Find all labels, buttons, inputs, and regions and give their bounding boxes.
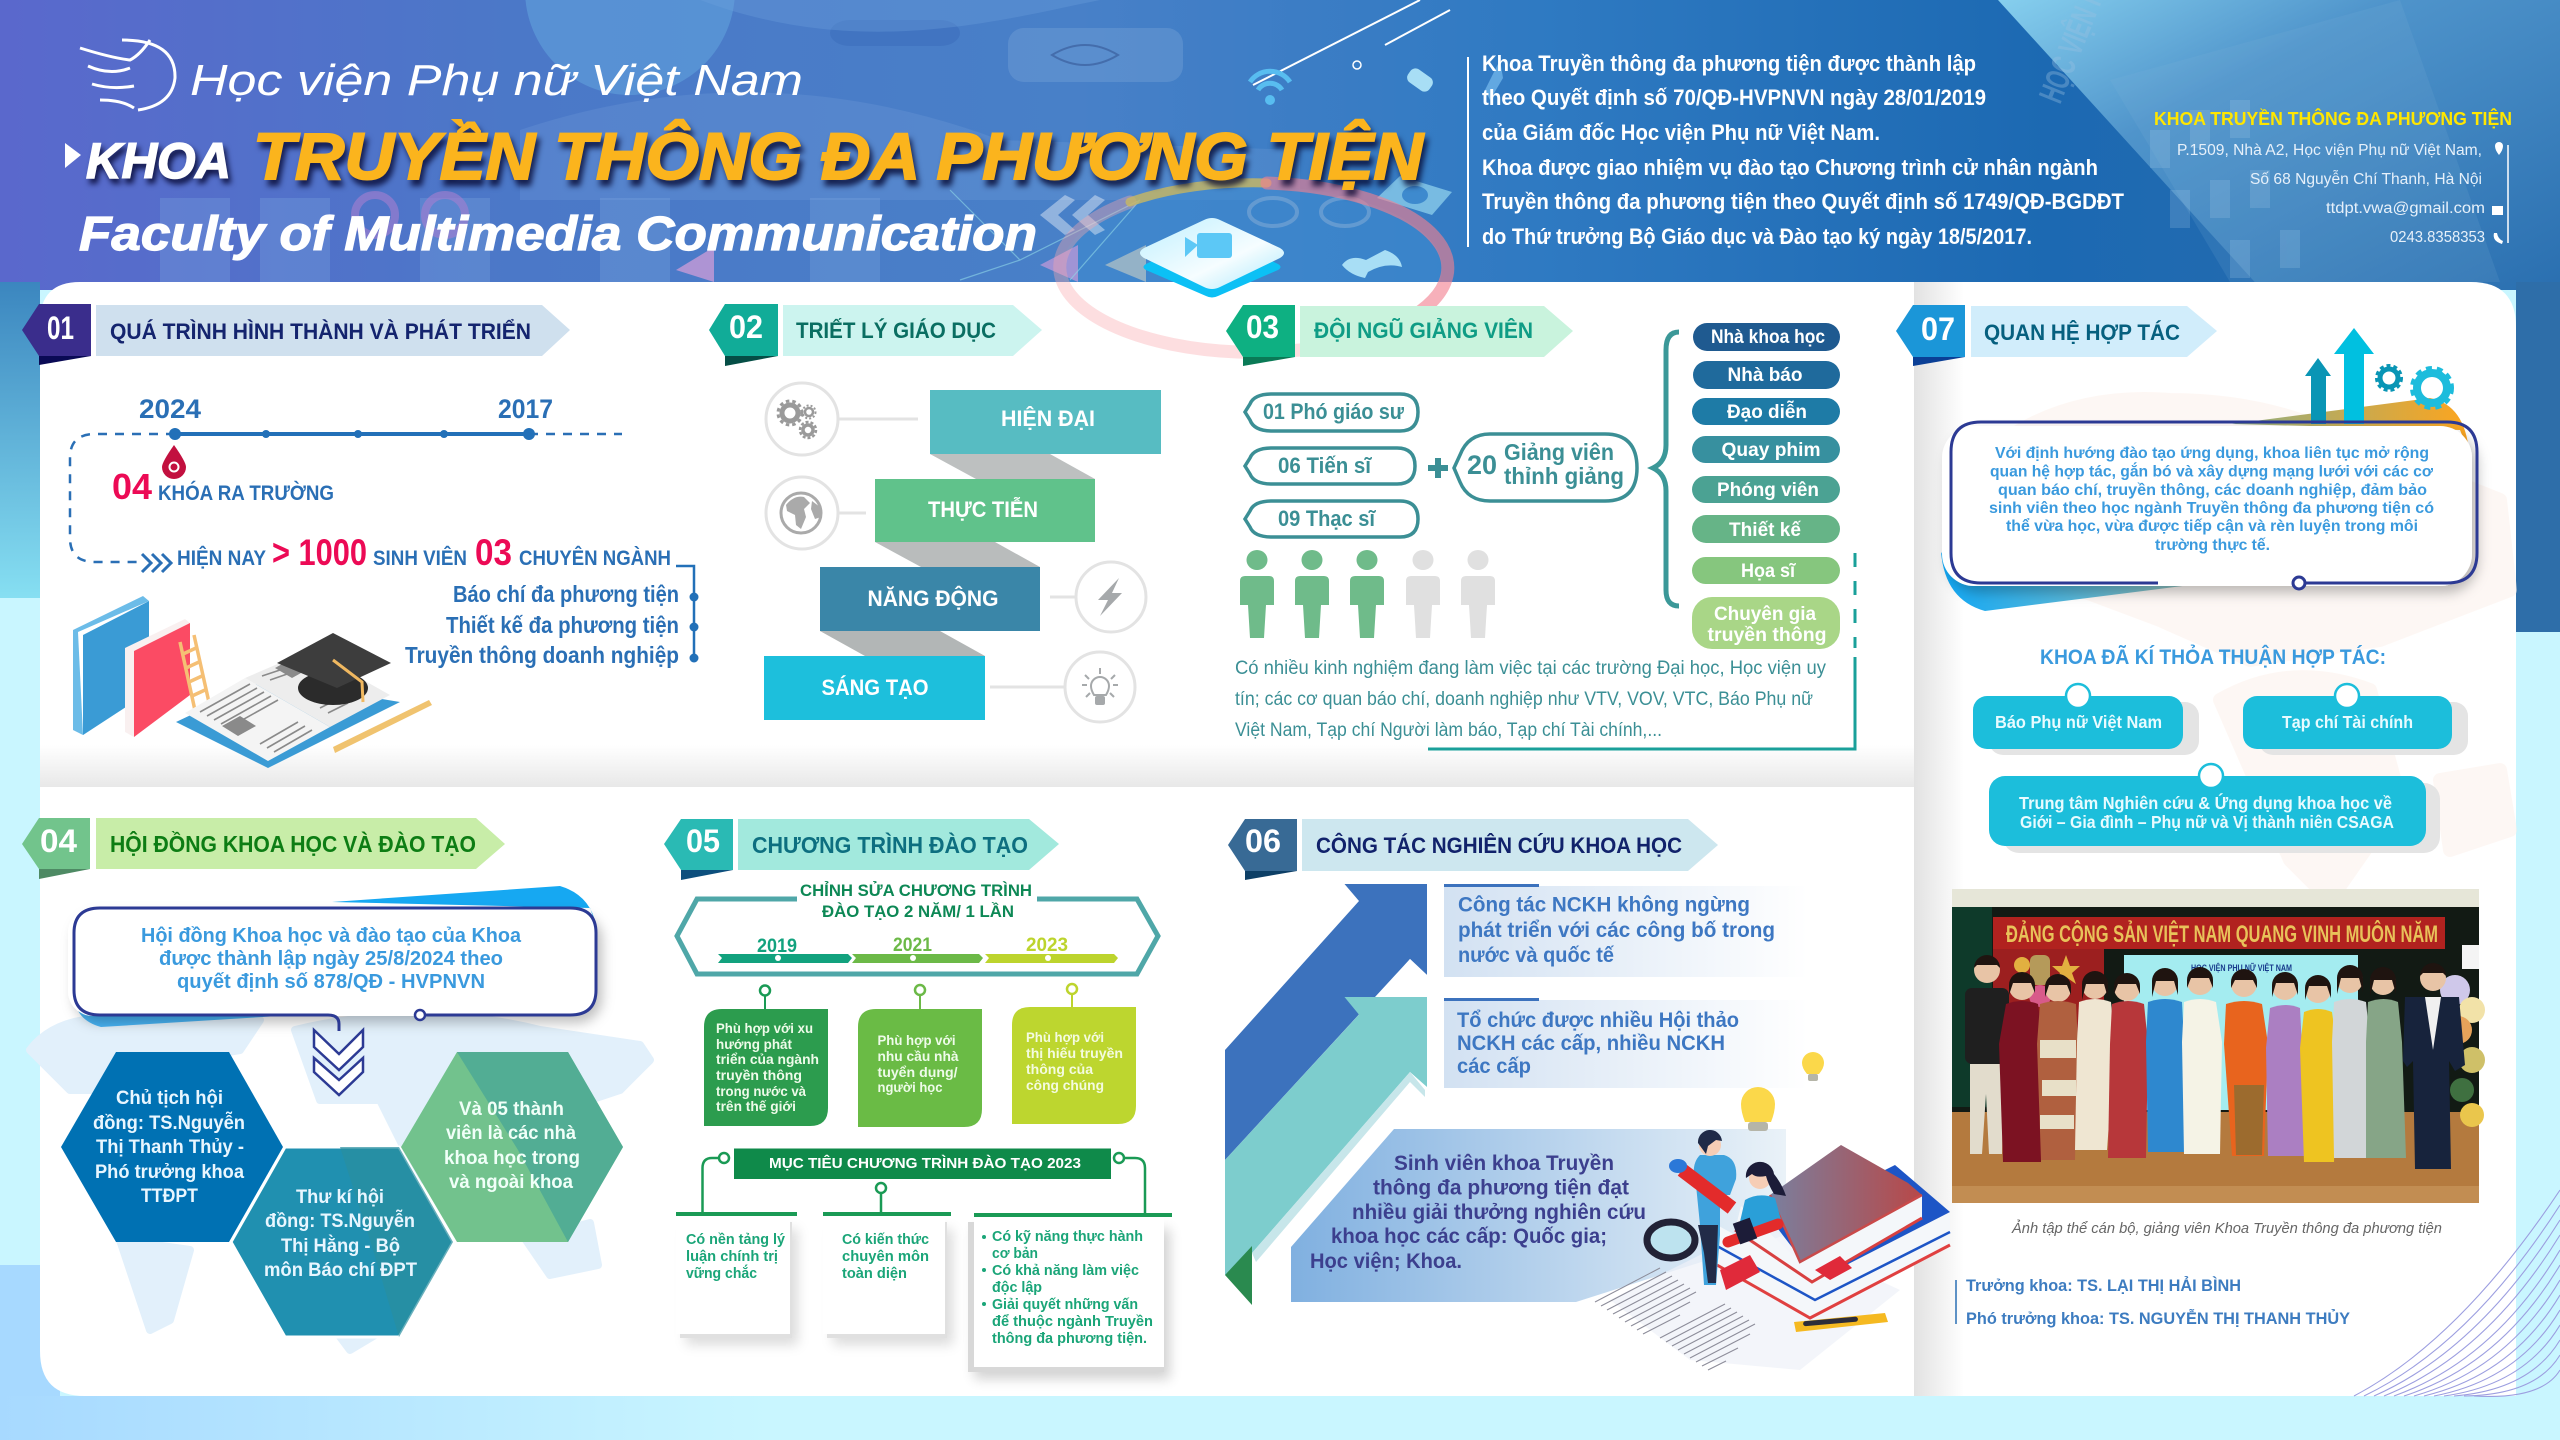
pill: visiting lecturers <box>1454 434 1637 501</box>
text panel: student awards: nhiều giải thưởng nghiên cứu <box>1352 1201 1646 1224</box>
card: 2021: tuyển dụng/ <box>878 1064 958 1080</box>
icon: globe <box>766 477 866 549</box>
list of three majors: Báo chí đa phương tiện <box>453 581 679 607</box>
objective box: practical skills: Có khả năng làm việc <box>992 1263 1139 1279</box>
callout: cooperation orientation: trường thực tế. <box>2155 537 2270 554</box>
english subtitle: Faculty of Multimedia Communication <box>79 208 1037 261</box>
pill: visiting lecturers: thỉnh giảng <box>1504 463 1624 489</box>
callout: council establishment <box>68 908 596 1031</box>
hexagon: council secretary <box>231 1147 453 1337</box>
partner: women's newspaper <box>1973 684 2199 755</box>
card: 2023: thị hiếu truyền <box>1026 1045 1123 1061</box>
header: faculty description <box>1468 51 2125 249</box>
objective box: practical skills: để thuộc ngành Truyền <box>992 1314 1153 1330</box>
arrow: double chevron down <box>314 1030 363 1095</box>
panel: 05 training programme <box>664 819 1172 1372</box>
panel: 01 formation and development <box>22 304 698 768</box>
pill: visiting lecturers: Giảng viên <box>1504 439 1614 465</box>
icon: map pin drop <box>162 445 186 479</box>
partner: CSAGA: Trung tâm Nghiên cứu & Ứng dụng khoa học về <box>2019 792 2392 813</box>
banner: 2023 objectives: MỤC TIÊU CHƯƠNG TRÌNH ĐÀO TẠO 2023 <box>769 1154 1081 1172</box>
section heading 01 <box>96 305 570 356</box>
visiting lecturer roles: Thiết kế <box>1729 520 1801 541</box>
section tab 05 <box>664 819 733 880</box>
bar: dynamic <box>820 567 1040 631</box>
arrow: blue rising <box>1225 884 1427 1160</box>
bar: modern: HIỆN ĐẠI <box>1001 406 1095 431</box>
card: 2023: thông của <box>1026 1061 1093 1077</box>
section heading 06 <box>1302 819 1718 871</box>
text panel: student awards: Học viện; Khoa. <box>1310 1250 1462 1273</box>
section tab 01 <box>22 304 91 365</box>
objective box: specialist knowledge: toàn diện <box>842 1266 907 1282</box>
background world map: peach (cooperation column) <box>1960 399 2510 900</box>
visiting lecturer roles: Phóng viên <box>1717 480 1819 501</box>
objective box: political theory: luận chính trị <box>686 1249 778 1265</box>
hexagon: council members: Và 05 thành <box>459 1099 564 1120</box>
section tab 06 <box>1228 819 1297 880</box>
objective box: political theory: vững chắc <box>686 1264 757 1282</box>
objective box: practical skills: độc lập <box>992 1280 1042 1296</box>
card: 2023 <box>1012 984 1136 1124</box>
revision timeline frame: ĐÀO TẠO 2 NĂM/ 1 LẦN <box>822 902 1014 921</box>
objective box: practical skills: thông đa phương tiện. <box>992 1331 1147 1347</box>
hexagon: council secretary: Thư kí hội <box>296 1187 384 1208</box>
text panel: student awards: khoa học các cấp: Quốc gia; <box>1331 1225 1607 1248</box>
plus sign <box>1428 458 1448 478</box>
timeline 2024 to 2017: 2024 <box>139 394 201 424</box>
faculty leaders: Phó trưởng khoa: TS. NGUYỄN THỊ THANH THỦY <box>1966 1309 2351 1328</box>
section tab 03: 03 <box>1246 309 1279 345</box>
visiting lecturer roles: Họa sĩ <box>1741 561 1797 582</box>
panel: 06 scientific research <box>1225 819 1950 1370</box>
pill: doctors <box>1245 448 1415 484</box>
panel: 04 science and training council <box>22 818 623 1337</box>
staff experience text: Có nhiều kinh nghiệm đang làm việc tại các trường Đại học, Học viện uy <box>1235 658 1826 679</box>
card: 2021: nhu cầu nhà <box>878 1048 959 1064</box>
agreements heading: KHOA ĐÃ KÍ THỎA THUẬN HỢP TÁC: <box>2040 645 2386 669</box>
curly brace <box>1653 332 1679 606</box>
callout: council establishment: được thành lập ngày 25/8/2024 theo <box>159 948 503 970</box>
card: 2019: triển của ngành <box>716 1051 819 1067</box>
hexagon: council secretary: môn Báo chí ĐPT <box>264 1260 417 1281</box>
hexagon: council secretary: Thị Hằng - Bộ <box>281 1235 400 1257</box>
bar: creative: SÁNG TẠO <box>822 675 928 700</box>
section tab 03 <box>1226 305 1295 366</box>
section tab 02 <box>709 304 778 366</box>
timeline 2024 to 2017 <box>70 394 622 572</box>
header: contact block: 0243.8358353 <box>2390 229 2485 246</box>
visiting lecturer roles: Nhà khoa học <box>1711 327 1825 348</box>
card: 2021: Phù hợp với <box>878 1032 956 1048</box>
section heading 07: QUAN HỆ HỢP TÁC <box>1984 320 2180 345</box>
section heading 02: TRIẾT LÝ GIÁO DỤC <box>796 318 996 343</box>
card: 2019: Phù hợp với xu <box>716 1020 813 1036</box>
stat: students and majors: CHUYÊN NGÀNH <box>519 546 671 570</box>
callout: council establishment: Hội đồng Khoa học và đào tạo của Khoa <box>141 925 522 947</box>
revision timeline frame: 2019 <box>757 936 797 957</box>
objective box: practical skills <box>968 1153 1172 1372</box>
text panel: workshops <box>1444 998 1808 1088</box>
objective box: political theory: Có nền tảng lý <box>686 1232 785 1248</box>
section heading 04 <box>96 818 505 869</box>
section heading 05: CHƯƠNG TRÌNH ĐÀO TẠO <box>752 831 1028 858</box>
stat: graduating cohorts <box>112 466 334 507</box>
text panel: student awards: thông đa phương tiện đạt <box>1373 1176 1629 1200</box>
stat: graduating cohorts: KHÓA RA TRƯỜNG <box>158 481 334 505</box>
hexagon: council chair: Chủ tịch hội <box>116 1088 223 1109</box>
stat: graduating cohorts: 04 <box>112 466 152 507</box>
header: title <box>65 119 1424 261</box>
partner: CSAGA: Giới – Gia đình – Phụ nữ và Vị thành niên CSAGA <box>2020 812 2394 832</box>
pill: masters <box>1245 501 1418 537</box>
decorative ring around video diamond <box>1060 183 1448 352</box>
hexagon: council members: khoa học trong <box>444 1148 580 1169</box>
hexagon: council secretary: đồng: TS.Nguyễn <box>265 1210 415 1232</box>
staff experience text: Việt Nam, Tạp chí Người làm báo, Tạp chí Tài chính,... <box>1235 720 1662 741</box>
blue swoosh <box>1941 552 2206 611</box>
header: logo and academy name <box>80 40 803 110</box>
bar: practical <box>875 479 1095 542</box>
text panel: workshops: NCKH các cấp, nhiều NCKH <box>1457 1032 1725 1055</box>
pill: masters: 09 Thạc sĩ <box>1278 506 1377 531</box>
hexagon: council members <box>401 1052 623 1242</box>
objective box: specialist knowledge <box>823 1183 951 1338</box>
stat: students and majors: 03 <box>475 532 512 573</box>
title word KHOA: KHOA <box>86 133 231 189</box>
revision timeline frame: CHỈNH SỬA CHƯƠNG TRÌNH <box>800 881 1032 900</box>
card: 2023: công chúng <box>1026 1077 1104 1093</box>
header: contact block <box>2154 108 2512 246</box>
timeline 2024 to 2017: 2017 <box>498 394 553 424</box>
pill: associate professor <box>1245 394 1418 431</box>
bar: modern <box>930 390 1161 454</box>
section tab 06: 06 <box>1245 823 1281 859</box>
header: faculty description: của Giám đốc Học viện Phụ nữ Việt Nam. <box>1482 120 1880 145</box>
arrow marker <box>65 143 81 168</box>
white content panel <box>40 282 2516 1396</box>
bar: practical: THỰC TIỄN <box>928 496 1038 522</box>
title main: TRUYỀN THÔNG ĐA PHƯƠNG TIỆN <box>253 119 1424 193</box>
stat: students and majors <box>177 532 671 573</box>
illustration: books and graduation cap <box>73 596 432 768</box>
text panel: publications: Công tác NCKH không ngừng <box>1458 894 1750 916</box>
section heading 02 <box>783 305 1042 356</box>
list of three majors <box>405 566 698 668</box>
card: 2019 <box>704 986 828 1126</box>
hexagon: council members: và ngoài khoa <box>449 1172 573 1193</box>
hexagon: council chair: Phó trưởng khoa <box>95 1162 244 1183</box>
callout: cooperation orientation: quan hệ hợp tác, gắn bó và xây dựng mạng lưới với các cơ <box>1990 462 2434 480</box>
section heading 03 <box>1300 306 1573 357</box>
icon: lightning bolt <box>1050 562 1146 632</box>
icon: light bulbs <box>1741 1052 1824 1131</box>
section tab 07: 07 <box>1921 311 1955 347</box>
icon: people row <box>1240 550 1495 638</box>
staff degree pills <box>1245 394 1418 537</box>
partner: women's newspaper: Báo Phụ nữ Việt Nam <box>1995 712 2162 732</box>
header: contact block: KHOA TRUYỀN THÔNG ĐA PHƯƠNG TIỆN <box>2154 108 2512 129</box>
section tab 07 <box>1896 305 1965 366</box>
hexagon: council chair: đồng: TS.Nguyễn <box>93 1112 245 1134</box>
icon: gears <box>2376 366 2452 408</box>
text panel: publications <box>1444 884 1808 977</box>
background world map: blue (council section) <box>30 1015 650 1350</box>
card: 2023: Phù hợp với <box>1026 1029 1104 1045</box>
section tab 05: 05 <box>686 823 720 859</box>
icon: gears <box>766 383 918 455</box>
stat: students and majors: SINH VIÊN <box>373 546 467 570</box>
pill: visiting lecturers: 20 <box>1467 450 1497 480</box>
icon: light bulb <box>990 652 1135 722</box>
header: contact block: Số 68 Nguyễn Chí Thanh, Hà Nội <box>2250 171 2482 188</box>
callout: cooperation orientation: thể vừa học, vừa được tiếp cận và rèn luyện trong môi <box>2006 517 2418 535</box>
card: 2021: người học <box>878 1079 943 1095</box>
revision timeline frame: 2023 <box>1026 935 1068 956</box>
section heading 03: ĐỘI NGŨ GIẢNG VIÊN <box>1314 318 1533 343</box>
hexagon: council chair: Thị Thanh Thủy - <box>96 1137 244 1158</box>
header: contact block: P.1509, Nhà A2, Học viện Phụ nữ Việt Nam, <box>2177 142 2482 159</box>
list of three majors: Thiết kế đa phương tiện <box>446 612 679 638</box>
academy name: Học viện Phụ nữ Việt Nam <box>190 56 803 105</box>
visiting lecturer roles: Nhà báo <box>1728 365 1802 386</box>
section heading 01: QUÁ TRÌNH HÌNH THÀNH VÀ PHÁT TRIỂN <box>110 319 531 344</box>
text panel: publications: nước và quốc tế <box>1458 944 1614 967</box>
illustration: students studying on books <box>1595 1130 1950 1370</box>
visiting lecturer roles: Quay phim <box>1722 440 1820 461</box>
visiting lecturer roles: Đạo diễn <box>1727 401 1807 423</box>
faculty leaders <box>1956 1276 2351 1328</box>
callout: cooperation orientation: Với định hướng đào tạo ứng dụng, khoa liên tục mở rộng <box>1995 445 2429 462</box>
list of three majors: Truyền thông doanh nghiệp <box>405 642 679 668</box>
banner: 2023 objectives <box>734 1148 1111 1179</box>
group photo <box>1952 889 2485 1203</box>
header: faculty description: do Thứ trưởng Bộ Giáo dục và Đào tạo ký ngày 18/5/2017. <box>1482 224 2032 249</box>
partner: finance magazine <box>2243 684 2468 755</box>
pill: doctors: 06 Tiến sĩ <box>1278 453 1373 478</box>
text panel: workshops: Tổ chức được nhiều Hội thảo <box>1457 1009 1739 1032</box>
staff experience text: tín; các cơ quan báo chí, doanh nghiệp như VTV, VOV, VTC, Báo Phụ nữ <box>1235 689 1813 710</box>
people in group photo <box>1965 955 2465 1169</box>
header: faculty description: theo Quyết định số 70/QĐ-HVPNVN ngày 28/01/2019 <box>1482 85 1986 110</box>
section divider shading <box>40 282 1964 1396</box>
bar: dynamic: NĂNG ĐỘNG <box>868 586 998 611</box>
arrow light strip <box>1252 1072 1425 1262</box>
pill: associate professor: 01 Phó giáo sư <box>1263 399 1404 424</box>
visiting lecturer roles: truyền thông <box>1708 625 1826 646</box>
section tab 01: 01 <box>47 310 74 346</box>
revision timeline frame <box>677 881 1158 974</box>
faculty leaders: Trưởng khoa: TS. LẠI THỊ HẢI BÌNH <box>1966 1276 2241 1295</box>
header: faculty description: Khoa Truyền thông đa phương tiện được thành lập <box>1482 51 1976 76</box>
photo caption: Ảnh tập thể cán bộ, giảng viên Khoa Truyền thông đa phương tiện <box>2011 1219 2442 1237</box>
hexagon: council chair: TTĐPT <box>141 1186 198 1207</box>
section tab 02: 02 <box>729 309 763 345</box>
card: 2019: trong nước và <box>716 1083 806 1099</box>
panel: 07 cooperation <box>1896 305 2485 1328</box>
hexagon: council chair <box>61 1052 283 1242</box>
callout: council establishment: quyết định số 878/QĐ - HVPNVN <box>177 971 485 993</box>
callout: cooperation orientation: sinh viên theo học ngành Truyền thông đa phương tiện có <box>1989 500 2434 517</box>
objective box: practical skills: cơ bản <box>992 1246 1038 1262</box>
objective box: specialist knowledge: Có kiến thức <box>842 1232 929 1248</box>
objective box: political theory <box>676 1153 797 1338</box>
card: 2019: truyền thông <box>716 1067 802 1083</box>
revision timeline frame: 2021 <box>893 935 932 956</box>
icon: academy logo <box>80 40 175 110</box>
bar: creative <box>764 656 985 720</box>
card: 2021 <box>858 985 982 1127</box>
section tab 04: 04 <box>40 823 77 859</box>
header: faculty description: Truyền thông đa phương tiện theo Quyết định số 1749/QĐ-BGDĐT <box>1482 189 2125 214</box>
section heading 06: CÔNG TÁC NGHIÊN CỨU KHOA HỌC <box>1316 833 1682 858</box>
group photo: HỌC VIỆN PHỤ NỮ VIỆT NAM <box>2191 962 2292 973</box>
header: contact block: ttdpt.vwa@gmail.com <box>2326 200 2485 217</box>
partner: finance magazine: Tạp chí Tài chính <box>2282 712 2413 732</box>
hexagon: council members: viên là các nhà <box>446 1123 576 1144</box>
staircase connectors <box>820 454 1095 656</box>
card: 2019: hướng phát <box>716 1036 792 1052</box>
partner: CSAGA <box>1989 764 2440 853</box>
section heading 04: HỘI ĐỒNG KHOA HỌC VÀ ĐÀO TẠO <box>110 830 476 857</box>
visiting lecturer roles: Chuyên gia <box>1714 604 1816 625</box>
callout: cooperation orientation <box>1942 422 2477 589</box>
visiting lecturer roles <box>1692 323 1840 649</box>
text panel: student awards <box>1291 1129 1786 1302</box>
text panel: student awards: Sinh viên khoa Truyền <box>1394 1152 1614 1175</box>
arrow: green base <box>1225 1246 1252 1305</box>
icon: video diamond <box>1140 218 1284 298</box>
arrow light edge <box>1377 959 1427 997</box>
header: faculty description: Khoa được giao nhiệm vụ đào tạo Chương trình cử nhân ngành <box>1482 155 2098 180</box>
icon: growth arrows <box>2305 328 2374 424</box>
objective box: practical skills: Có kỹ năng thực hành <box>992 1229 1143 1245</box>
card: 2019: trên thế giới <box>716 1098 796 1114</box>
arrow: teal rising <box>1225 997 1427 1275</box>
panel: 02 education philosophy <box>709 304 1161 722</box>
section heading 07 <box>1971 306 2217 357</box>
stat: students and majors: HIỆN NAY <box>177 546 266 570</box>
blue swooshes <box>74 886 596 1027</box>
staff experience text <box>1235 553 1855 749</box>
section heading 05 <box>738 819 1059 870</box>
header decorative technology shapes <box>160 0 2500 350</box>
objective box: practical skills: Giải quyết những vấn <box>992 1297 1138 1313</box>
objective box: specialist knowledge: chuyên môn <box>842 1249 929 1265</box>
text panel: workshops: các cấp <box>1457 1055 1531 1078</box>
panel: 03 teaching staff <box>1226 305 1855 749</box>
stat: students and majors: > 1000 <box>272 532 367 573</box>
decorative wave lines bottom right <box>2354 1190 2560 1396</box>
orange swoosh <box>2232 398 2469 452</box>
section tab 04 <box>22 818 90 879</box>
text panel: publications: phát triển với các công bố trong <box>1458 919 1775 942</box>
callout: cooperation orientation: quan báo chí, truyền thông, các doanh nghiệp, đảm bảo <box>1998 482 2427 499</box>
